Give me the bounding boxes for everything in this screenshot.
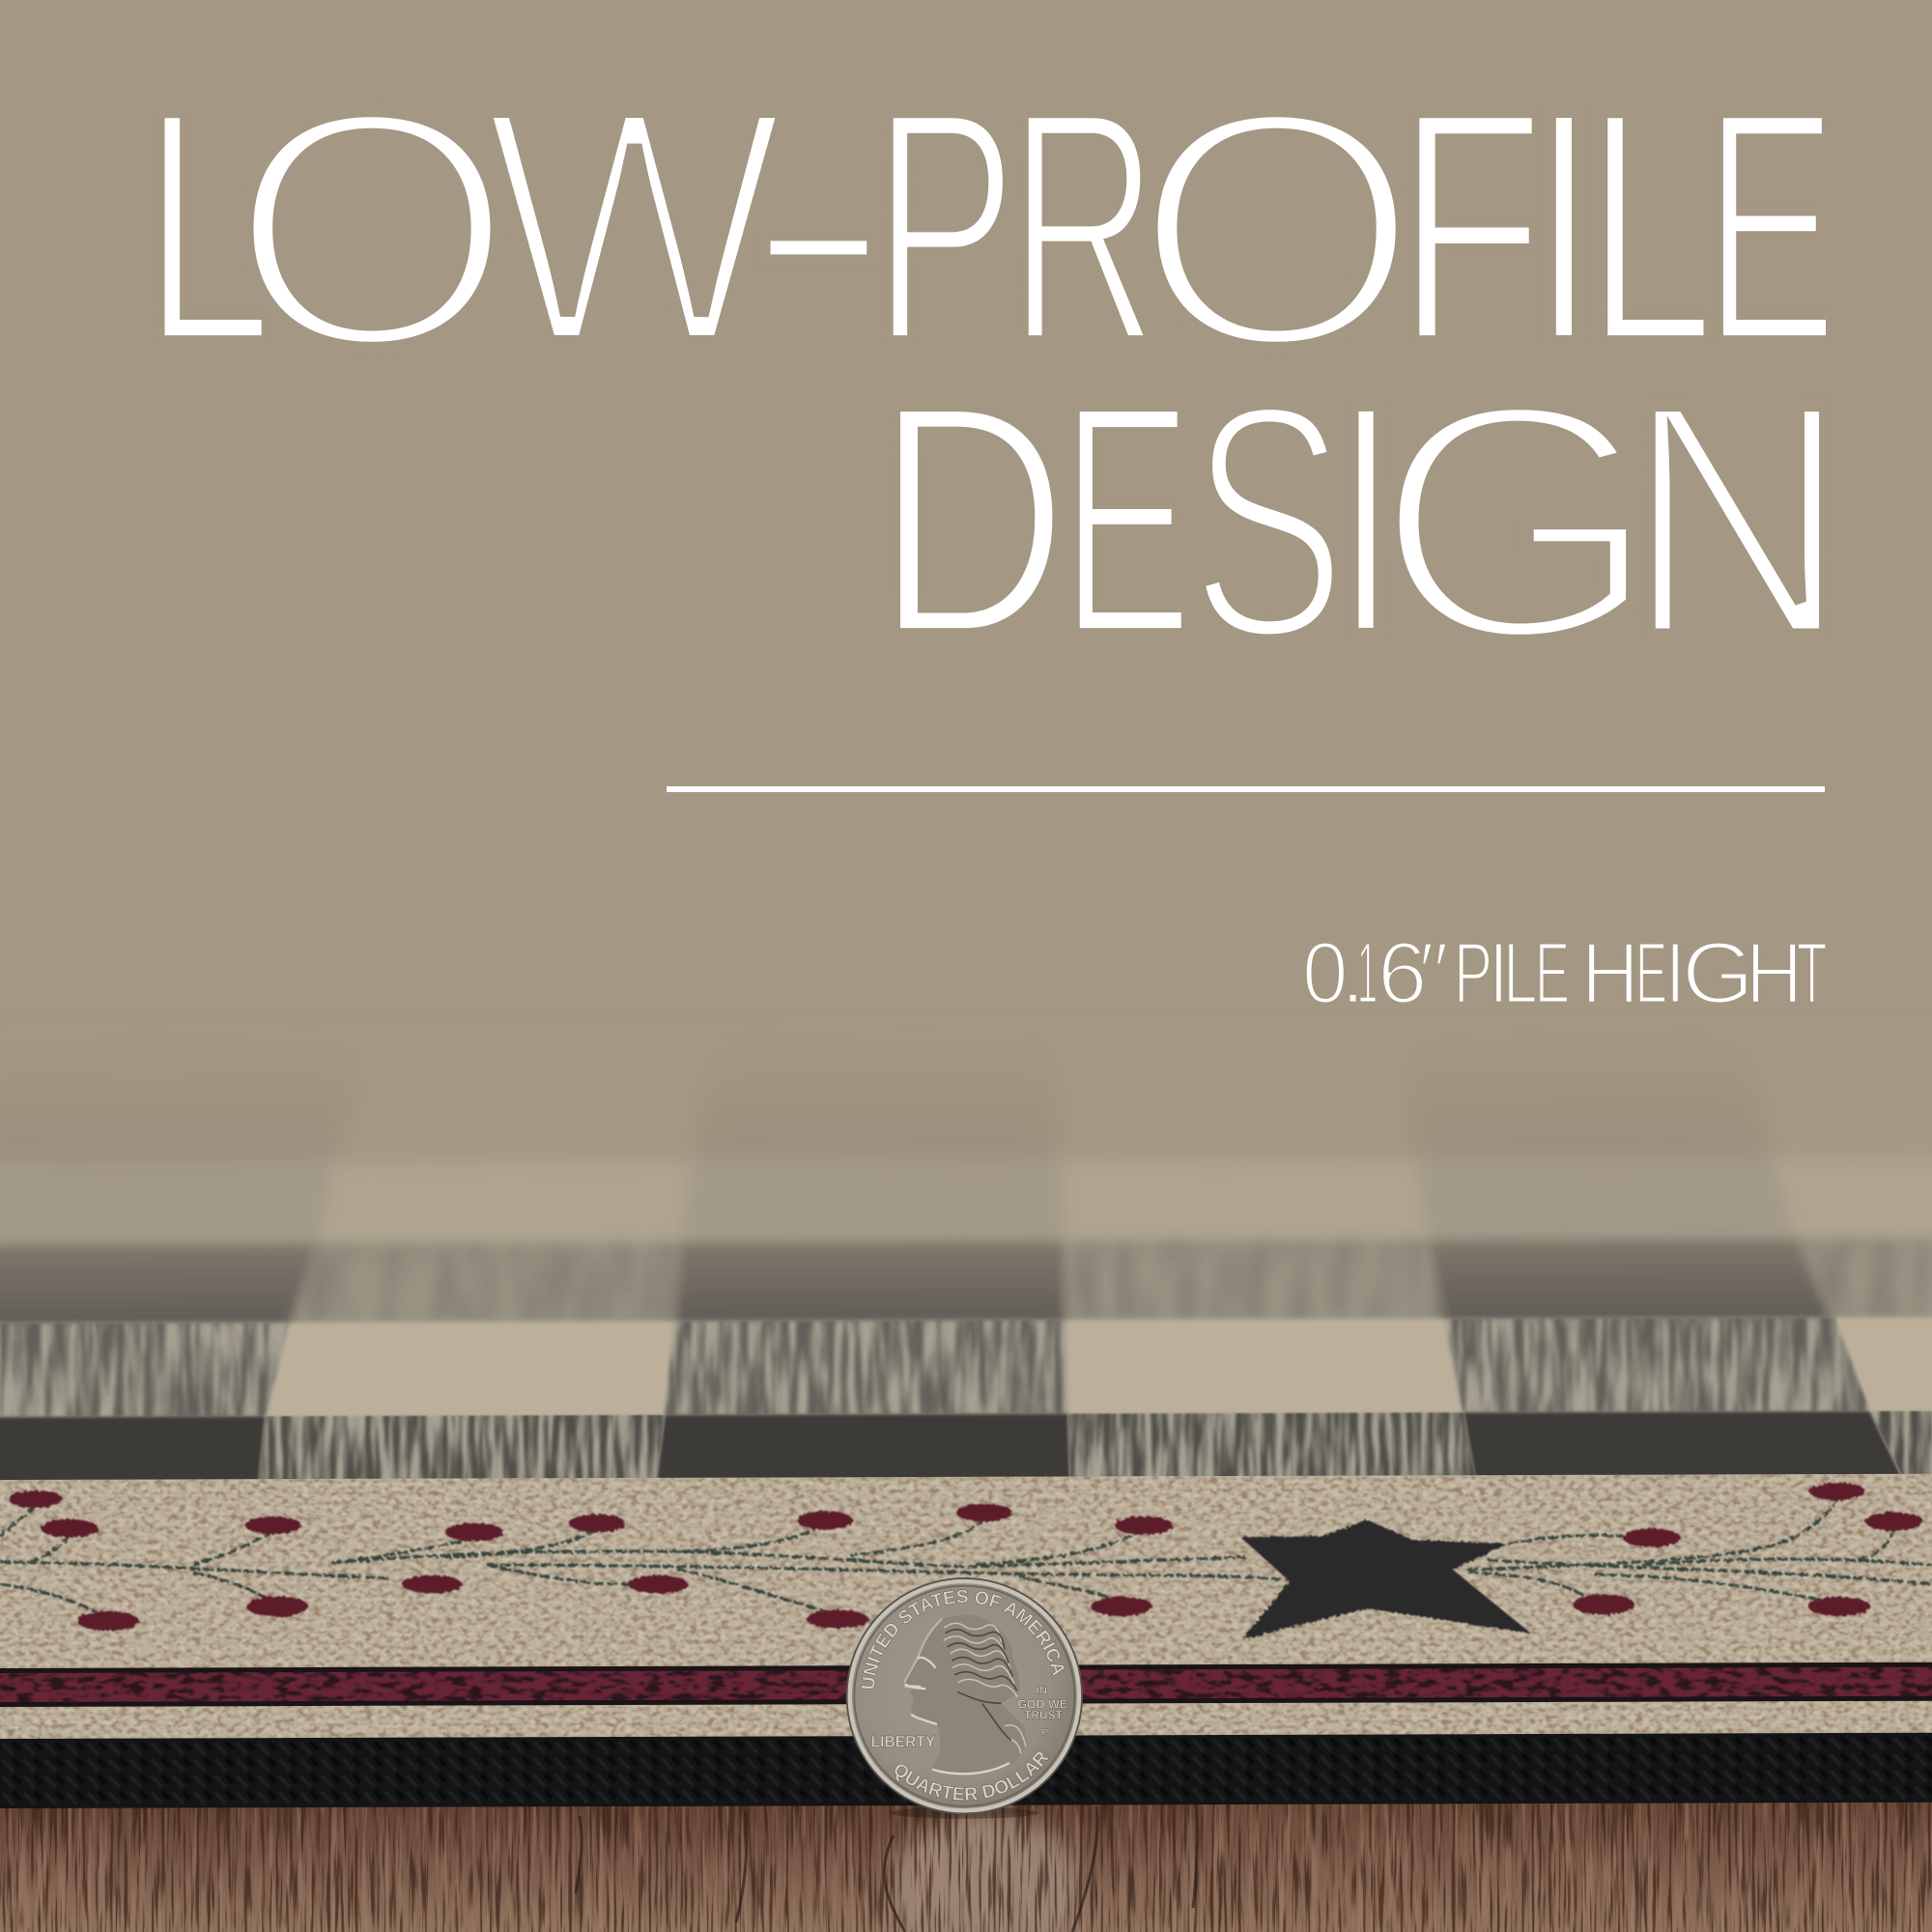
- subtitle: pile height: H: [1746, 925, 1803, 1022]
- title: W: [482, 38, 786, 415]
- divider rule: [667, 786, 1825, 792]
- title: N: [1624, 334, 1851, 705]
- subtitle: pile height: I: [1663, 925, 1686, 1022]
- title: I: [1518, 38, 1610, 415]
- title: S: [1190, 336, 1347, 708]
- title: E: [1704, 43, 1837, 411]
- subtitle: pile height: [1302, 925, 1827, 1022]
- coin: quarter dollar: [846, 1577, 1083, 1819]
- title: D: [874, 337, 1069, 703]
- coin lettering: GOD WE: [1017, 1697, 1067, 1711]
- subtitle: pile height: .: [1340, 925, 1366, 1022]
- coin lettering: LIBERTY: [871, 1732, 935, 1750]
- photo: rug on wood floor with quarter: [0, 1138, 1932, 1932]
- star: [1240, 1520, 1531, 1639]
- subtitle: pile height: G: [1682, 925, 1754, 1022]
- title: E: [1061, 337, 1192, 703]
- title: I: [1322, 331, 1409, 708]
- coin portrait: [904, 1615, 1028, 1774]
- coin lettering: P: [1042, 1728, 1049, 1739]
- title: [142, 35, 1851, 711]
- subtitle: pile height: H: [1581, 925, 1639, 1022]
- title: O: [1132, 41, 1421, 418]
- title: L: [142, 43, 272, 411]
- subtitle: pile height: P: [1454, 925, 1492, 1022]
- subtitle: pile height: 6: [1378, 925, 1428, 1022]
- coin lettering: UNITED STATES OF AMERICA: [862, 1590, 1065, 1690]
- title: L: [1585, 43, 1715, 411]
- burgundy stripe: [0, 1662, 1932, 1707]
- title: O: [228, 41, 516, 418]
- berries: [9, 1483, 1923, 1631]
- wood floor: [0, 1787, 1932, 1932]
- subtitle: pile height: 0: [1302, 925, 1349, 1022]
- subtitle: pile height: T: [1797, 925, 1827, 1022]
- coin lettering: QUARTER DOLLAR: [895, 1751, 1049, 1801]
- black bound edge: [0, 1733, 1932, 1808]
- coin lettering: IN: [1037, 1685, 1047, 1696]
- subtitle: pile height: E: [1635, 925, 1667, 1022]
- subtitle: pile height: E: [1535, 925, 1570, 1022]
- subtitle: pile height: 1: [1357, 925, 1378, 1022]
- subtitle: pile height: L: [1503, 925, 1537, 1022]
- cream border band: [0, 1474, 1932, 1741]
- berry vine and star motif: [0, 1483, 1932, 1639]
- title: R: [1009, 43, 1158, 411]
- title: P: [872, 43, 1017, 411]
- title: -: [741, 35, 896, 408]
- subtitle: pile height: I: [1489, 925, 1508, 1022]
- title: F: [1396, 43, 1545, 411]
- vines: [0, 1499, 1932, 1615]
- title: G: [1373, 333, 1662, 711]
- buffalo check field: [0, 1138, 1932, 1480]
- rug: [0, 1138, 1932, 1808]
- coin lettering: TRUST: [1024, 1708, 1064, 1721]
- coin lettering: [862, 1590, 1067, 1801]
- subtitle: pile height: ″: [1418, 925, 1449, 1022]
